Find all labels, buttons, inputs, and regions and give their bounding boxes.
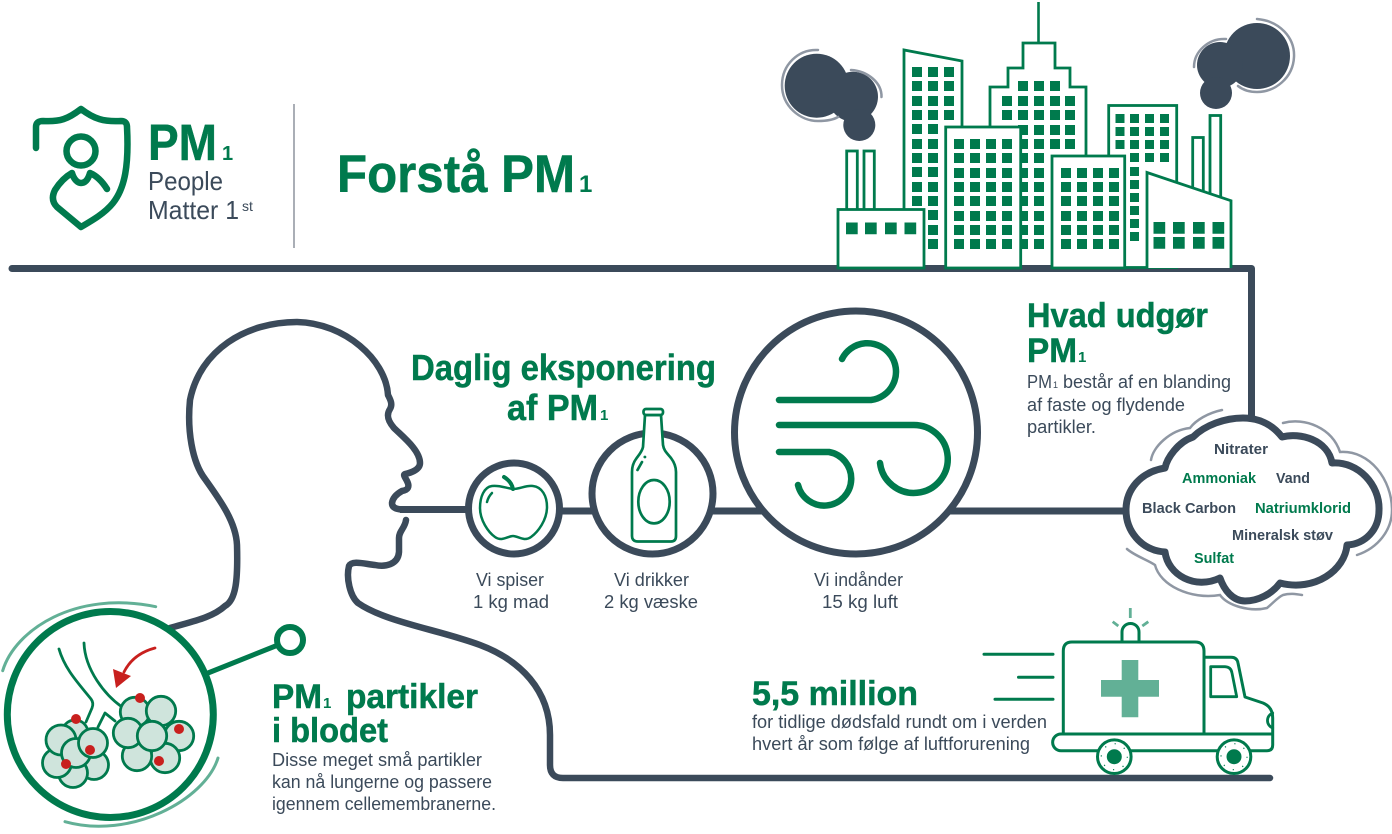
cloud labels [1142, 442, 1351, 567]
caption: drink: Vi drikker [614, 570, 689, 590]
caption: breathe [814, 570, 903, 612]
heading: 1 [323, 695, 331, 712]
body text: partikler. [1027, 417, 1096, 437]
building: center front [946, 127, 1021, 268]
heading [272, 678, 478, 750]
logo wordmark [148, 114, 253, 225]
speed lines [984, 654, 1053, 699]
illustration: city skyline [782, 2, 1294, 268]
caption: eat: 1 kg mad [473, 592, 549, 612]
section: what PM1 consists of [1027, 297, 1231, 437]
magnifier circle [7, 612, 213, 818]
caption: eat [473, 570, 549, 612]
heading: Hvad udgør [1027, 297, 1208, 335]
heading: daily exposure: Daglig eksponering [411, 347, 716, 388]
icon: red arrow [113, 648, 155, 688]
factory: left with chimneys [838, 151, 924, 268]
body text: kan nå lungerne og passere [272, 772, 492, 792]
description [752, 712, 1047, 754]
cross [1101, 660, 1159, 717]
top frame line [12, 268, 1252, 425]
description: hvert år som følge af luftforurening [752, 734, 1030, 754]
caption: eat: Vi spiser [476, 570, 544, 590]
logo [36, 109, 253, 227]
building: right front [1052, 156, 1125, 268]
wheel: rear [1098, 740, 1131, 774]
cloud labels: Ammoniak [1182, 471, 1257, 487]
head back and nose line [170, 322, 420, 628]
chin and torso line [348, 520, 1270, 778]
cloud labels: Black Carbon [1142, 501, 1236, 517]
lungs: bronchi [59, 643, 122, 727]
ambulance body [1063, 642, 1204, 734]
cloud labels: Mineralsk støv [1232, 528, 1333, 544]
heading [1027, 297, 1208, 370]
outer arcs [3, 603, 218, 826]
siren [1113, 608, 1148, 642]
body text [272, 750, 496, 814]
exposure: apple circle [468, 463, 560, 554]
cab window [1211, 667, 1237, 697]
title: Forstå PM [337, 145, 575, 204]
caption: breathe: Vi indånder [814, 570, 903, 590]
building: tall left [904, 50, 962, 249]
heading: PM [1027, 332, 1077, 370]
heading: PM [272, 678, 322, 716]
lungs: alveoli right [113, 696, 194, 773]
cloud outer arcs [1127, 410, 1392, 609]
heading: daily exposure: af PM [507, 387, 598, 428]
factory: right with chimneys [1147, 116, 1231, 268]
cloud of PM1 components [1126, 410, 1392, 609]
divider [293, 104, 295, 248]
particles [61, 693, 184, 769]
cab [1053, 657, 1273, 751]
smoke: right [1194, 19, 1294, 109]
headlight [1267, 713, 1273, 728]
section: particles in blood [272, 678, 496, 814]
icon: bottle [632, 409, 676, 542]
caption: drink [604, 570, 698, 612]
icon: wind [779, 343, 948, 506]
big number: 5,5 million [752, 675, 918, 713]
description: for tidlige dødsfald rundt om i verden [752, 712, 1047, 732]
building: center tower [990, 2, 1086, 249]
body text: består af en blanding [1063, 372, 1231, 392]
body text: igennem cellemembranerne. [272, 794, 496, 814]
title: 1 [579, 171, 592, 198]
logo wordmark: Matter 1 [148, 195, 239, 225]
cloud outline [1126, 418, 1379, 601]
caption: breathe: 15 kg luft [822, 592, 898, 612]
body text: 1 [1053, 380, 1058, 390]
person outline: head and chest [170, 322, 1270, 778]
cloud labels: Nitrater [1214, 442, 1268, 458]
heading: partikler [346, 678, 478, 716]
caption: drink: 2 kg væske [604, 592, 698, 612]
heading: 1 [1078, 349, 1086, 366]
mouth airflow line [400, 510, 1135, 511]
icon: apple [480, 477, 547, 539]
section: mortality statistic [752, 675, 1047, 754]
lungs: alveoli left [42, 720, 108, 788]
heading: daily exposure [411, 347, 716, 428]
exposure: bottle circle [592, 409, 713, 554]
body text [1027, 372, 1231, 437]
body text: af faste og flydende [1027, 395, 1185, 415]
smoke: left [782, 50, 882, 141]
icon: ambulance [984, 608, 1273, 774]
section: lung magnifier [3, 603, 303, 826]
cloud labels: Vand [1276, 471, 1310, 487]
heading: i blodet [272, 712, 388, 750]
logo wordmark: 1 [222, 143, 233, 165]
cloud labels: Natriumklorid [1255, 501, 1351, 517]
logo wordmark: People [148, 166, 223, 196]
exposure: air circle [734, 311, 978, 554]
logo wordmark: st [242, 198, 253, 214]
body text: PM [1027, 372, 1052, 392]
logo wordmark: PM [148, 114, 217, 171]
wheel: front [1217, 740, 1251, 774]
connector and ring [208, 627, 303, 673]
body text: Disse meget små partikler [272, 750, 482, 770]
building: right back [1109, 106, 1177, 268]
icon: shield with person [36, 109, 127, 227]
heading: daily exposure: 1 [600, 407, 608, 424]
cloud labels: Sulfat [1194, 551, 1234, 567]
